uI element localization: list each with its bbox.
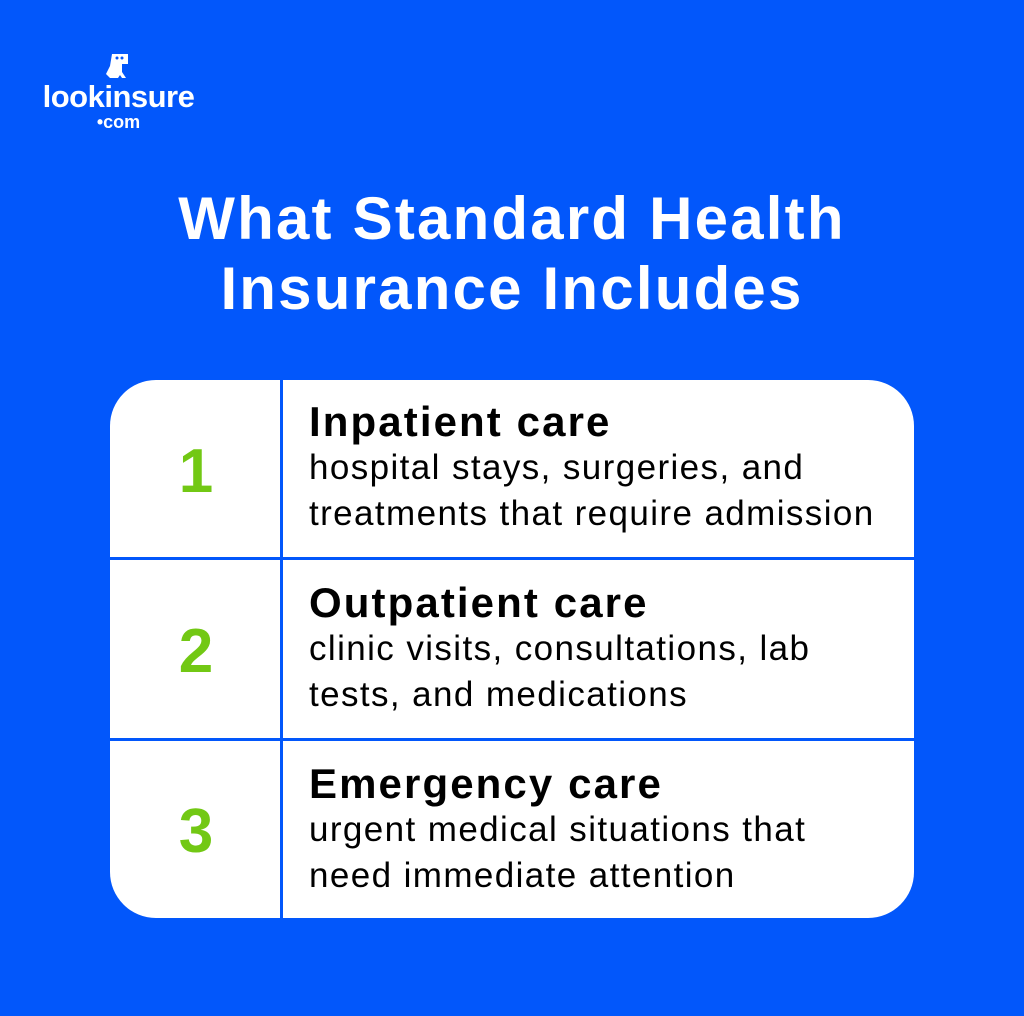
row 3 text: Emergency care	[309, 760, 663, 807]
row 2 text: tests, and medications	[309, 675, 688, 714]
icon: dinosaur	[106, 54, 128, 78]
row 1 text: treatments that require admission	[309, 494, 875, 533]
row 3 text	[309, 760, 806, 895]
title: Insurance Includes	[220, 255, 804, 322]
row 2 text: Outpatient care	[309, 579, 649, 626]
row 1 text: Inpatient care	[309, 398, 611, 445]
panel: coverage table	[110, 380, 914, 918]
logo text: lookinsure	[43, 79, 194, 114]
row 1 text: hospital stays, surgeries, and	[309, 448, 804, 487]
title: What Standard Health	[178, 185, 846, 252]
logo: •com	[97, 112, 140, 132]
row 2 text: clinic visits, consultations, lab	[309, 629, 810, 668]
row 3 text: need immediate attention	[309, 856, 736, 895]
title	[178, 185, 846, 322]
row 3 number: 3	[179, 797, 213, 866]
row 2 number: 2	[179, 617, 213, 686]
logo	[43, 54, 194, 132]
row 1 text	[309, 398, 875, 533]
row 3 text: urgent medical situations that	[309, 810, 806, 849]
row 1 number: 1	[179, 437, 213, 506]
row 2 text	[309, 579, 810, 714]
